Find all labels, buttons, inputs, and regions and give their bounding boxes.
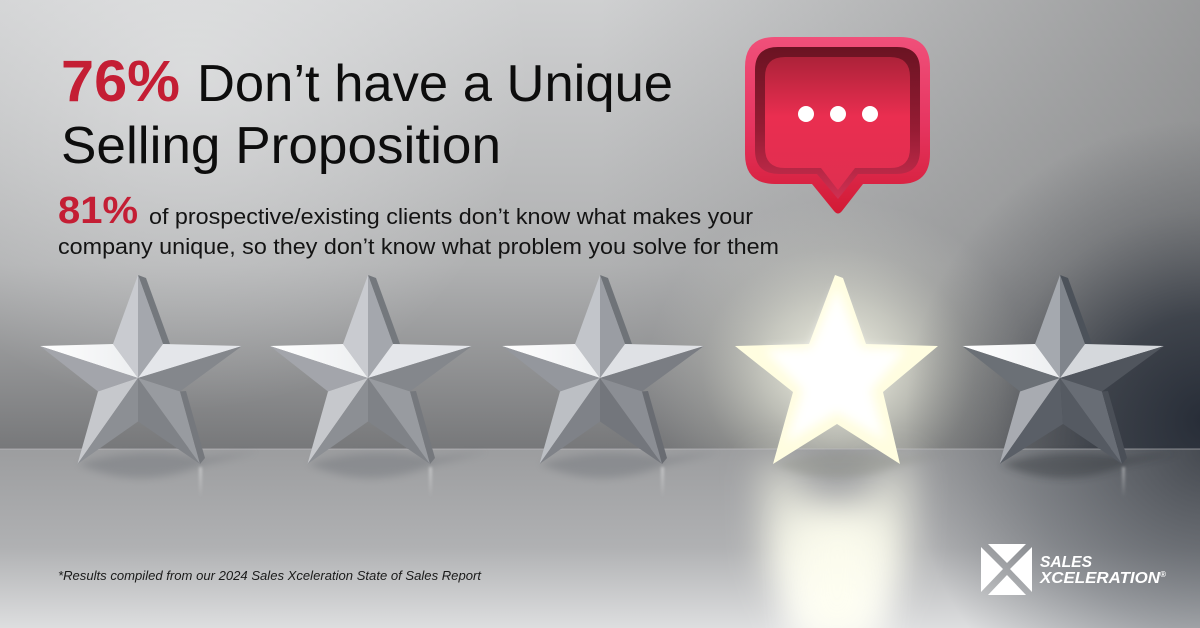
logo wordmark: XCELERATION [1039, 570, 1161, 587]
heading stat: 76%: 76% [61, 49, 180, 114]
star 1 shadow [78, 452, 258, 478]
heading [61, 49, 673, 175]
icon: red speech bubble [745, 37, 930, 214]
star floor reflections [199, 467, 1125, 497]
star 3 [502, 275, 704, 464]
icon: three white dots [798, 106, 878, 122]
subheading stat: 81%: 81% [58, 190, 138, 232]
star 3 shadow [540, 452, 720, 478]
subheading line 2: company unique, so they don’t know what problem you solve for them [58, 234, 779, 259]
star 4 shadow [774, 452, 954, 478]
logo wordmark: ® [1160, 570, 1166, 579]
heading line 1: Don’t have a Unique [197, 55, 673, 113]
star 2 shadow [308, 452, 488, 478]
logo wordmark [1039, 554, 1166, 587]
footnote: *Results compiled from our 2024 Sales Xceleration State of Sales Report [58, 568, 482, 583]
heading line 2: Selling Proposition [61, 117, 501, 175]
star 1 [40, 275, 242, 464]
star 4: glowing [735, 275, 938, 464]
logo wordmark: SALES [1040, 554, 1093, 571]
logo mark [981, 544, 1032, 595]
logo: Sales Xceleration [981, 544, 1166, 595]
subheading line 1: of prospective/existing clients don’t know what makes your [149, 204, 754, 229]
subheading [58, 190, 779, 259]
star 5 shadow [1001, 452, 1181, 478]
star 5 [962, 275, 1164, 464]
star 2 [270, 275, 472, 464]
